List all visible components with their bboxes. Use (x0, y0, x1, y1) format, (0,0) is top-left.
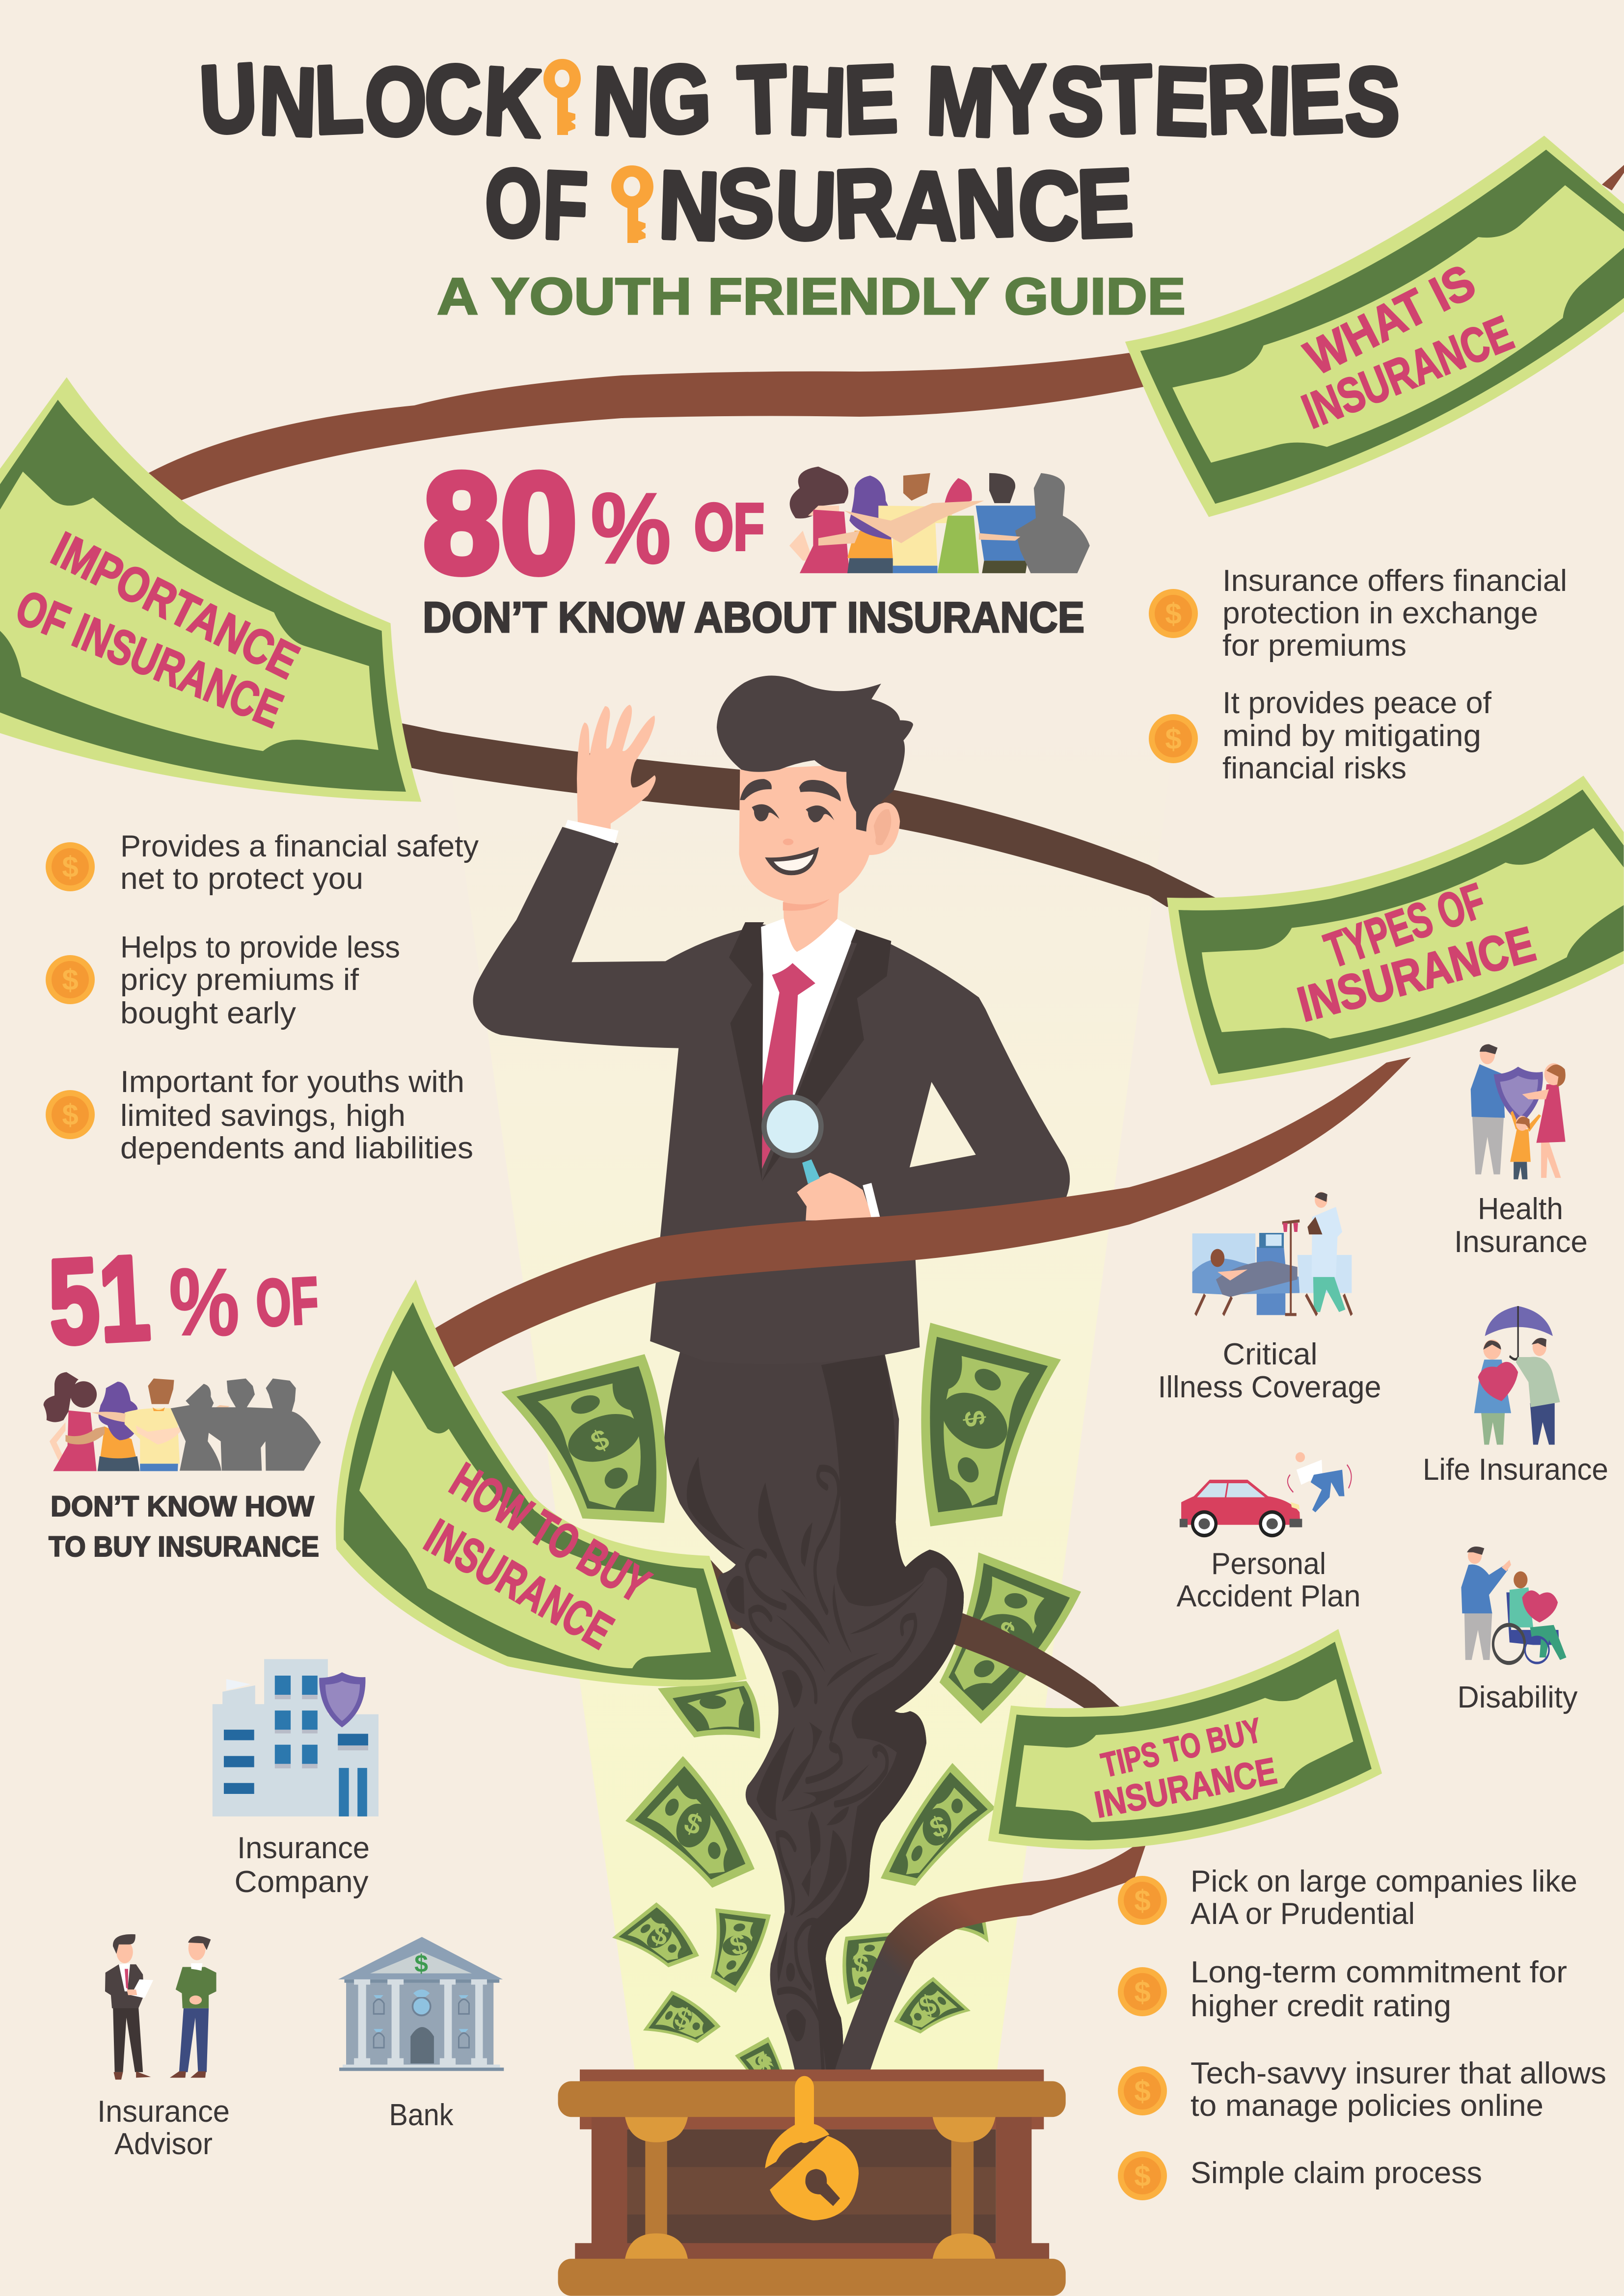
label: critical illness coverage: Critical (1222, 1337, 1318, 1371)
icon: critical illness hospital bed (1192, 1192, 1352, 1315)
bill B (921, 1320, 1061, 1563)
coin (1118, 1876, 1167, 1925)
bill L (735, 2035, 798, 2134)
label: insurance company: Insurance (237, 1831, 370, 1865)
coin (46, 842, 95, 891)
caption: don't know how to buy insurance: DON’T KNOW HOW (51, 1491, 314, 1522)
text block (1191, 2056, 1606, 2123)
bill G (612, 1900, 702, 1991)
text block: mind by mitigating (1222, 719, 1481, 753)
bill K: $ (671, 2001, 696, 2036)
stat: 80 percent (423, 444, 1090, 603)
light beam from chest (444, 726, 1176, 2070)
bill B: $ (958, 1409, 991, 1428)
icon: bank building (338, 1937, 504, 2071)
text block: for premiums (1222, 629, 1407, 663)
bill banner: importance of insurance: IMPORTANCE (44, 521, 307, 690)
caption: don't know how to buy insurance: TO BUY INSURANCE (49, 1531, 319, 1563)
text block (1191, 1865, 1577, 1931)
coin: $ (1134, 1884, 1151, 1917)
bill banner: what is insurance: WHAT IS (1297, 254, 1484, 386)
icon: insurance advisors (105, 1934, 217, 2080)
title: OF (483, 149, 590, 260)
text block (1222, 686, 1492, 785)
stat: 80 percent: 80 (423, 444, 577, 603)
coin: $ (1134, 2075, 1151, 2108)
stat: 51 percent (44, 1230, 321, 1471)
bill banner: how to buy insurance: HOW TO BUY (441, 1452, 659, 1613)
bill banner: what is insurance (1125, 135, 1624, 517)
bill banner: tips to buy insurance (988, 1629, 1382, 1849)
magnifying glass (764, 1097, 821, 1184)
bill J (892, 1975, 971, 2056)
bill L: $ (753, 2048, 775, 2082)
label: critical illness coverage (1158, 1337, 1381, 1404)
text block (120, 829, 479, 896)
coin: $ (1165, 722, 1182, 755)
raised hand (577, 705, 656, 830)
text block: higher credit rating (1191, 1989, 1451, 2023)
label: insurance company: Company (235, 1865, 368, 1899)
bill G: $ (648, 1917, 673, 1952)
ribbon: lower behind smoke (707, 1556, 1127, 1713)
bill M (947, 1914, 989, 1943)
bill C: $ (991, 1614, 1020, 1650)
lock (765, 2076, 859, 2220)
bill H (680, 1908, 775, 1993)
bill F: $ (925, 1809, 952, 1844)
label: insurance advisor (97, 2095, 230, 2161)
stat: 51 percent: OF (254, 1263, 320, 1340)
label: health insurance (1454, 1192, 1588, 1259)
label: critical illness coverage: Illness Coverage (1158, 1370, 1381, 1404)
text block: limited savings, high (120, 1099, 406, 1133)
text block: Helps to provide less (120, 931, 400, 964)
smoke silhouette (665, 1349, 964, 2077)
shirt (761, 918, 856, 1169)
coin (1149, 589, 1198, 638)
coin (46, 955, 95, 1004)
text block: Insurance offers financial (1222, 564, 1567, 598)
label: health insurance: Insurance (1454, 1225, 1588, 1259)
text block: Provides a financial safety (120, 829, 479, 863)
text block: net to protect you (120, 862, 363, 896)
hair (717, 676, 913, 831)
icon: key in second line (611, 165, 653, 243)
neck (783, 887, 839, 952)
icon: disability wheelchair (1461, 1547, 1567, 1663)
text block: AIA or Prudential (1191, 1897, 1415, 1931)
wrist cuff (863, 1183, 880, 1218)
cuff (565, 820, 619, 843)
text block (120, 931, 400, 1030)
bill A (501, 1352, 674, 1561)
head (739, 765, 900, 904)
bill D (658, 1681, 760, 1738)
bullets: importance of insurance (46, 829, 479, 1165)
man: businessman (473, 676, 1070, 1364)
text block: Tech-savvy insurer that allows (1191, 2056, 1606, 2090)
bill banner: types of insurance: INSURANCE (1292, 916, 1541, 1032)
stat: 80 percent: % (591, 472, 671, 585)
caption: don't know how to buy insurance (49, 1491, 319, 1563)
lapels (729, 922, 891, 1181)
bill I (841, 1932, 901, 2005)
caption: don't know about insurance: DON’T KNOW ABOUT INSURANCE (423, 593, 1084, 641)
title: UNLOCK (197, 44, 544, 157)
ribbon: to chest (835, 1836, 1149, 2071)
coin: $ (62, 1098, 79, 1131)
text block (1191, 1955, 1567, 2023)
label: insurance company (235, 1831, 370, 1899)
text block: Pick on large companies like (1191, 1865, 1577, 1898)
text block: Important for youths with (120, 1065, 464, 1099)
people group partly grey (44, 1372, 321, 1471)
ribbon: top (148, 353, 1151, 501)
bill H: $ (727, 1927, 750, 1962)
title: MYSTERIES (925, 45, 1402, 157)
bill banner: what is insurance: INSURANCE (1295, 305, 1520, 439)
icon: insurance company building (213, 1659, 379, 1816)
bill A: $ (586, 1423, 614, 1458)
icon: personal accident car (1180, 1452, 1352, 1537)
label: life insurance: Life Insurance (1423, 1453, 1608, 1487)
bill banner: tips to buy insurance: INSURANCE (1091, 1750, 1280, 1826)
coin: $ (62, 963, 79, 996)
stat: 80 percent: OF (694, 490, 764, 564)
coin: $ (1165, 597, 1182, 630)
bill J: $ (916, 1988, 940, 2023)
text block: pricy premiums if (120, 963, 359, 997)
treasure chest (558, 2069, 1066, 2296)
label: insurance advisor: Advisor (114, 2127, 213, 2161)
text block (1222, 564, 1567, 663)
title: NSURANCE (657, 149, 1135, 260)
jacket (473, 827, 1070, 1364)
text block: Simple claim process (1191, 2156, 1482, 2190)
ribbon tail: top right corner (1602, 165, 1624, 190)
label: health insurance: Health (1478, 1192, 1563, 1226)
text block: It provides peace of (1222, 686, 1492, 720)
man: legs turning into smoke (665, 1349, 964, 2077)
label: personal accident plan: Accident Plan (1176, 1579, 1361, 1613)
bank dollar sign: $ (414, 1950, 428, 1977)
small flying bills (501, 1320, 1088, 2134)
ribbon: middle behind man (393, 721, 1221, 907)
text block: bought early (120, 996, 296, 1030)
bullets: tips to buy insurance (1118, 1865, 1606, 2200)
coin (1118, 2151, 1167, 2200)
coin: $ (1134, 1976, 1151, 2008)
bill banner: types of insurance (1167, 775, 1624, 1085)
title (197, 44, 1402, 260)
bullets: what is insurance (1149, 564, 1567, 785)
bill banner: types of insurance: TYPES OF (1318, 873, 1492, 978)
bill banner: tips to buy insurance: TIPS TO BUY (1098, 1710, 1265, 1785)
bill I: $ (849, 1948, 871, 1982)
label: personal accident plan (1176, 1547, 1361, 1613)
tie (762, 963, 815, 1169)
text block: financial risks (1222, 751, 1407, 785)
icon: key in first line (543, 59, 581, 135)
title: THE (736, 45, 899, 156)
smoke swirl details (687, 1457, 925, 2041)
bill C (878, 1552, 1088, 1727)
bill E (625, 1752, 758, 1934)
smoke dark region (808, 1353, 964, 2077)
label: insurance advisor: Insurance (97, 2095, 230, 2129)
bill F (878, 1760, 996, 1923)
label: personal accident plan: Personal (1211, 1547, 1326, 1581)
icon: health insurance family (1471, 1044, 1566, 1179)
subtitle: A YOUTH FRIENDLY GUIDE (437, 267, 1186, 325)
holding hand (797, 1173, 874, 1221)
text block (120, 1065, 473, 1165)
title: NG (591, 45, 712, 156)
coin (1118, 1967, 1167, 2016)
label: disability: Disability (1457, 1681, 1578, 1714)
stat: 51 percent: % (169, 1249, 240, 1356)
coin (1118, 2066, 1167, 2115)
bill banner: importance of insurance (0, 377, 421, 802)
bill E: $ (680, 1806, 706, 1842)
bill banner: how to buy insurance: INSURANCE (416, 1509, 622, 1659)
bill banner: importance of insurance: OF INSURANCE (8, 580, 290, 738)
coin (46, 1090, 95, 1139)
label: bank: Bank (389, 2098, 454, 2132)
coin: $ (1134, 2160, 1151, 2192)
text block: dependents and liabilities (120, 1131, 473, 1165)
bill banner: how to buy insurance (336, 1280, 747, 1686)
icon: life insurance umbrella couple (1474, 1306, 1560, 1445)
people group colored (789, 467, 1090, 573)
text block: Long-term commitment for (1191, 1955, 1567, 1989)
coin: $ (62, 851, 79, 883)
stat: 51 percent: 51 (45, 1230, 153, 1369)
bill K (643, 1988, 723, 2066)
ribbon: across man (373, 1057, 1411, 1414)
face details (740, 779, 841, 875)
coin (1149, 714, 1198, 763)
text block: to manage policies online (1191, 2089, 1543, 2123)
text block: protection in exchange (1222, 596, 1538, 630)
